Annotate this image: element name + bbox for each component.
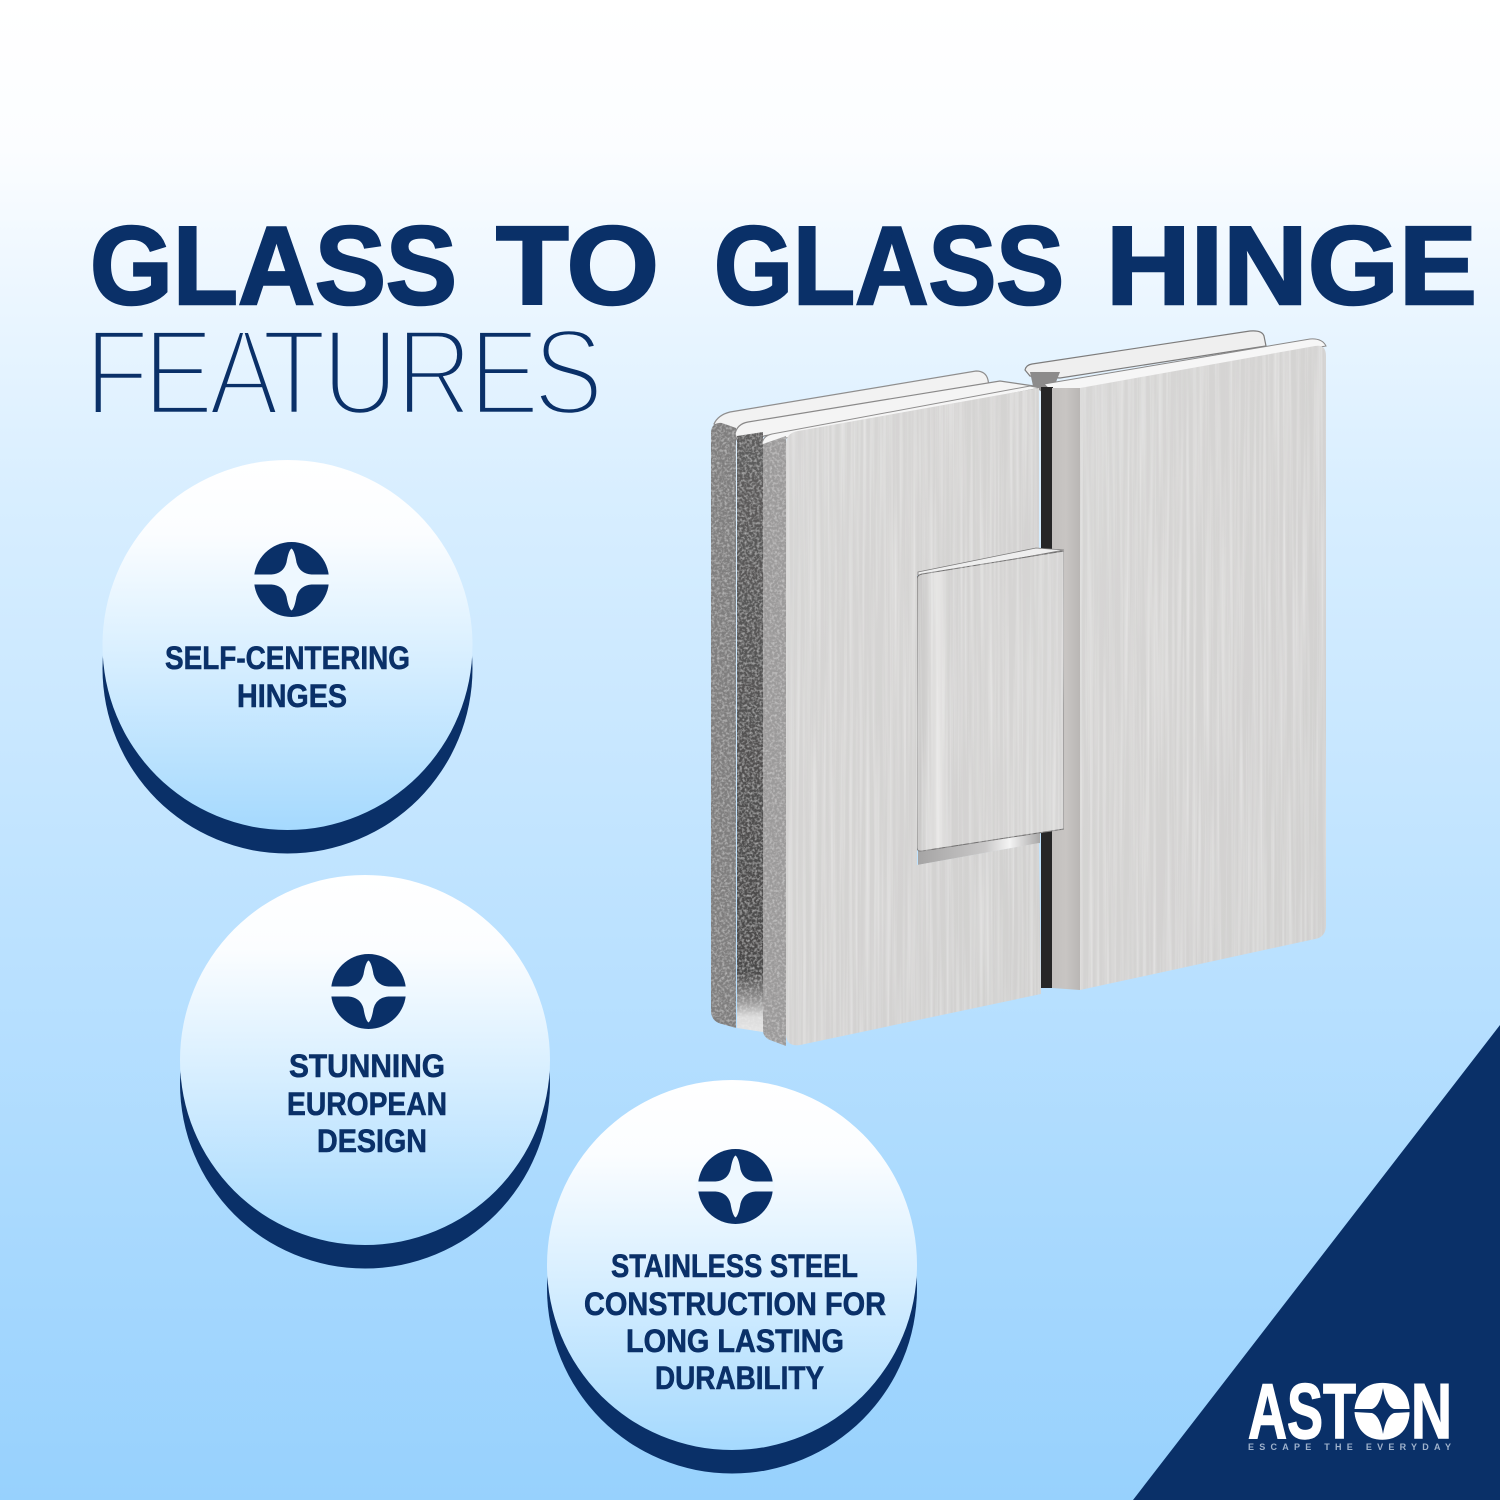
title [85,204,1477,441]
logo letter N: N [1411,1367,1452,1455]
hinge: connector block [1030,372,1060,392]
heading: glass to glass hinge: HINGE [1106,204,1477,328]
label: EUROPEAN [287,1086,447,1122]
hinge: back strip [711,423,736,1028]
feature circle: stainless steel construction [547,1080,917,1474]
label [584,1248,886,1396]
disc [547,1080,917,1450]
logo: aston [1248,1367,1452,1455]
label [165,640,410,714]
label: STAINLESS STEEL [611,1248,858,1284]
heading: glass to glass hinge [90,204,1477,328]
icon: star badge [252,542,330,617]
hinge: upper knuckle edge [918,548,1064,577]
hinge: middle strip [737,432,763,1032]
hinge: front side strip [763,436,786,1046]
hinge: lower notch band [918,831,1040,865]
hinge: middle rim [735,381,1034,440]
hinge: right front rim [1044,339,1326,392]
navy crescent [102,484,472,854]
corner triangle [1133,1025,1500,1500]
label: LONG LASTING [626,1323,844,1359]
label: STUNNING [289,1048,445,1084]
hinge: right bevel [1052,388,1080,990]
navy crescent [180,898,550,1268]
heading: glass to glass hinge: GLASS [714,204,1064,328]
label: CONSTRUCTION FOR [584,1286,886,1322]
feature circle: self-centering hinges [102,460,472,854]
hinge: back rim left [714,371,990,434]
logo letter O: O [1353,1367,1412,1455]
disc [180,875,550,1245]
hinge product image [711,331,1326,1046]
heading: features: FEATURES [85,304,604,441]
navy crescent [547,1104,917,1474]
label: HINGES [237,678,347,714]
hinge: dark gap [1041,387,1053,988]
hinge: right plate [1080,346,1326,990]
heading: glass to glass hinge: TO [496,204,659,328]
logo tagline: ESCAPE THE EVERYDAY [1248,1442,1451,1452]
label [287,1048,447,1159]
icon: star badge [330,954,408,1029]
hinge: left plate [786,388,1041,1045]
hinge: right back rim [1025,331,1266,378]
hinge: knuckle [917,551,1064,851]
disc [102,460,472,830]
logo O star disc [1354,1384,1412,1438]
icon: star badge [696,1149,774,1224]
label: DESIGN [317,1123,427,1159]
label: DURABILITY [655,1360,824,1396]
hinge: front rim [762,386,1040,448]
heading: glass to glass hinge: GLASS [90,204,457,328]
logo letters AST: AST [1248,1367,1356,1455]
feature circle: stunning european design [180,875,550,1268]
label: SELF-CENTERING [165,640,410,676]
